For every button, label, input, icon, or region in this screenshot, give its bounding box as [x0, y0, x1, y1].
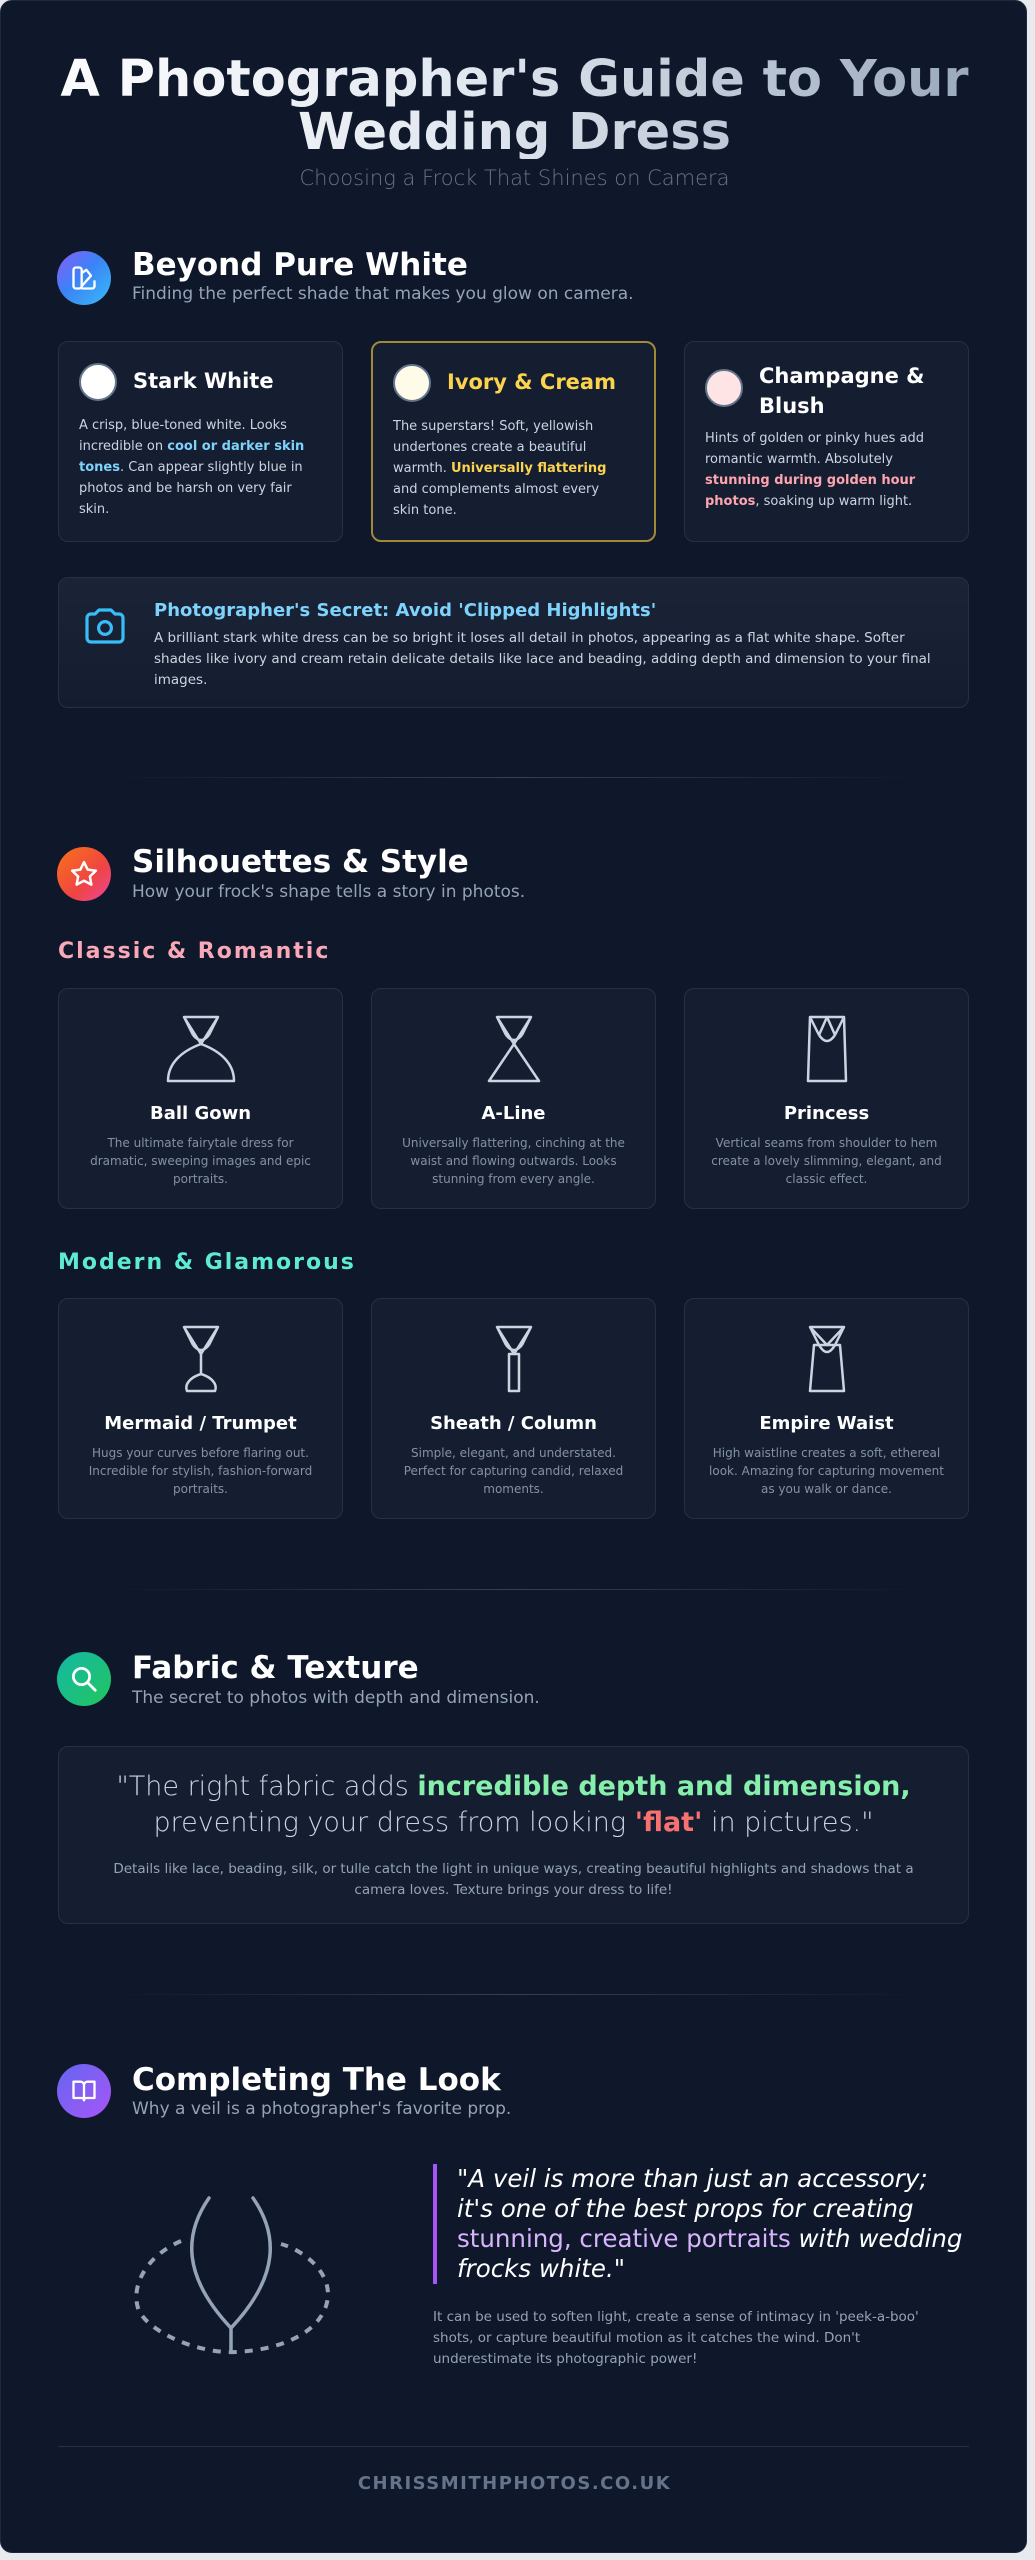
heading: beyond pure white: Beyond Pure White — [132, 247, 468, 283]
heading: completing the look: Completing The Look — [132, 2062, 501, 2098]
panel: champagne: Hints of golden or pinky hues add romantic warmth. Absolutely stunning during golden hour photos, soaking up warm light. — [705, 431, 924, 509]
panel: empire — [684, 1298, 969, 1519]
callout: veil quote: "A veil is more than just an accessory; it's one of the best props for creating stunning, creative portraits with wedding frocks white." — [457, 2164, 962, 2283]
panel: fabric quote: preventing your dress from looking 'flat' in pictures." — [153, 1807, 874, 1838]
heading: classic & romantic: Classic & Romantic — [58, 939, 330, 964]
panel: ball gown: Ball Gown — [150, 1103, 251, 1124]
subtitle: Choosing a Frock That Shines on Camera — [299, 166, 730, 190]
panel: stark white: Stark White — [133, 369, 274, 393]
panel: ivory — [371, 341, 656, 542]
panel: stark white — [58, 341, 343, 542]
panel: champagne: Blush — [759, 394, 825, 418]
panel: mermaid — [58, 1298, 343, 1519]
subheading: Why a veil is a photographer's favorite prop. — [132, 2099, 511, 2119]
panel: mermaid: Mermaid / Trumpet — [104, 1413, 297, 1434]
panel: a-line — [371, 988, 656, 1209]
panel: sheath — [371, 1298, 656, 1519]
panel: empire: Empire Waist — [759, 1413, 894, 1434]
title: A Photographer's Guide to Your — [60, 50, 969, 109]
footer: CHRISSMITHPHOTOS.CO.UK — [358, 2473, 671, 2494]
panel: sheath: Simple, elegant, and understated. Perfect for capturing candid, relaxed moments. — [404, 1446, 623, 1496]
panel: princess: Princess — [784, 1103, 869, 1124]
panel: mermaid: Hugs your curves before flaring out. Incredible for stylish, fashion-forward portraits. — [89, 1446, 312, 1496]
panel: empire: High waistline creates a soft, ethereal look. Amazing for capturing movement as you walk or dance. — [709, 1446, 944, 1496]
subheading: How your frock's shape tells a story in photos. — [132, 882, 525, 902]
panel: princess — [684, 988, 969, 1209]
title — [1, 53, 1028, 159]
panel: champagne: Champagne & — [759, 364, 924, 388]
panel: stark white: A crisp, blue-toned white. Looks incredible on cool or darker skin tones. Can appear slightly blue in photos and be harsh on very fair skin. — [79, 418, 304, 517]
subheading: The secret to photos with depth and dimension. — [132, 1688, 540, 1708]
panel: sheath: Sheath / Column — [430, 1413, 597, 1434]
panel: ball gown: The ultimate fairytale dress for dramatic, sweeping images and epic portraits. — [90, 1136, 311, 1186]
panel: ivory: The superstars! Soft, yellowish undertones create a beautiful warmth. Universally flattering and complements almost every skin tone. — [393, 419, 606, 518]
panel: ball gown — [58, 988, 343, 1209]
text block: veil body: It can be used to soften light, create a sense of intimacy in 'peek-a-boo' shots, or capture beautiful motion as it catches the wind. Don't underestimate its photographic power! — [433, 2309, 919, 2367]
icon: book — [57, 2064, 111, 2118]
callout: photographer's secret: A brilliant stark white dress can be so bright it loses all detail in photos, appearing as a flat white shape. Softer shades like ivory and cream retain delicate details like lace and beading, adding depth and dimension to your final images. — [154, 630, 931, 688]
icon: star — [57, 847, 111, 901]
panel: fabric quote — [58, 1746, 969, 1924]
callout: photographer's secret — [58, 577, 969, 708]
panel: fabric quote: Details like lace, beading, silk, or tulle catch the light in unique ways, creating beautiful highlights and shadows that a camera loves. Texture brings your dress to life! — [113, 1861, 914, 1898]
panel: ivory: Ivory & Cream — [447, 370, 616, 394]
panel: a-line: A-Line — [481, 1103, 546, 1124]
heading: modern & glamorous: Modern & Glamorous — [58, 1250, 356, 1275]
icon: magnifier — [57, 1652, 111, 1706]
title: Wedding Dress — [298, 103, 731, 162]
icon: veil illustration — [134, 2196, 330, 2354]
panel: fabric quote: "The right fabric adds incredible depth and dimension, — [116, 1771, 911, 1802]
panel: champagne — [684, 341, 969, 542]
panel: a-line: Universally flattering, cinching at the waist and flowing outwards. Looks stunning from every angle. — [402, 1136, 625, 1186]
panel: princess: Vertical seams from shoulder to hem create a lovely slimming, elegant, and classic effect. — [711, 1136, 942, 1186]
icon: swatch — [57, 251, 111, 305]
heading: fabric: Fabric & Texture — [132, 1650, 419, 1686]
heading: silhouettes: Silhouettes & Style — [132, 844, 469, 880]
icon: camera — [85, 608, 125, 644]
callout: photographer's secret: Photographer's Secret: Avoid 'Clipped Highlights' — [154, 600, 656, 621]
subheading: Finding the perfect shade that makes you glow on camera. — [132, 284, 634, 304]
